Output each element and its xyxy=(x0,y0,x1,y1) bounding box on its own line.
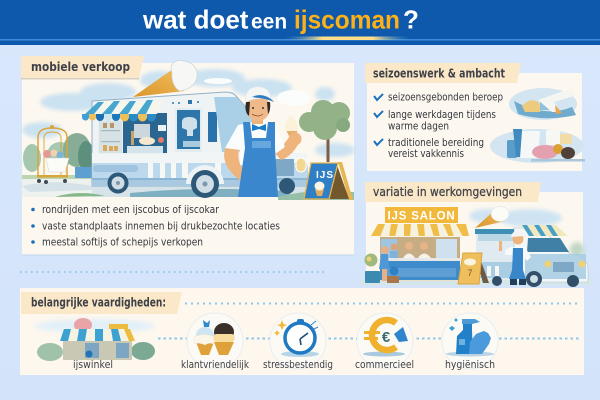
white clouds xyxy=(204,78,311,106)
dotted connectors xyxy=(185,302,581,304)
panel: variatie in werkomgevingen xyxy=(360,192,592,287)
icon: menu board: 7 xyxy=(467,268,473,278)
checklist: seizoensgebonden beroep xyxy=(388,92,503,104)
title: wat doet xyxy=(142,4,249,34)
icon: klantvriendelijk xyxy=(187,313,243,369)
label: hygiënisch: hygiënisch xyxy=(445,359,495,371)
left arm xyxy=(224,145,248,180)
awning xyxy=(85,101,163,114)
checklist: vereist vakkennis xyxy=(388,148,464,160)
awning scallops xyxy=(82,114,156,122)
icon: menu board xyxy=(458,253,489,284)
icon: stressbestendig xyxy=(270,313,326,369)
ice cream seller xyxy=(224,87,302,197)
icon: cone on small van roof xyxy=(475,206,509,228)
dotted divider xyxy=(20,271,326,273)
bushes xyxy=(23,133,94,172)
panel: belangrijke vaardigheden xyxy=(20,288,584,375)
icon: ice cream van xyxy=(82,92,307,198)
icon: ice cream shop xyxy=(35,318,155,361)
heading tab: mobiele verkoop xyxy=(21,56,144,80)
icon: IJS a-frame sign xyxy=(304,162,353,200)
checklist: warme dagen xyxy=(388,120,449,132)
apron xyxy=(238,122,278,197)
heading tab: belangrijke vaardigheden xyxy=(21,292,182,314)
van lower skirt xyxy=(92,153,307,164)
title: ijscoman xyxy=(294,4,400,34)
heading tab: belangrijke vaardigheden: belangrijke vaardigheden: xyxy=(31,296,166,310)
bullet list xyxy=(31,204,280,248)
tall blue window xyxy=(175,108,202,152)
serving window xyxy=(98,118,167,154)
bullet list: rondrijden met een ijscobus of ijscokar xyxy=(42,204,220,216)
head xyxy=(252,115,263,124)
shirt xyxy=(225,120,285,165)
people in salon xyxy=(390,242,431,259)
right arm xyxy=(272,136,299,160)
bullet list: vaste standplaats innemen bij drukbezochte locaties xyxy=(42,220,280,232)
cap xyxy=(246,87,274,102)
sky clouds xyxy=(22,69,355,157)
decor dots on van xyxy=(172,100,199,104)
icon: commercieel: € xyxy=(382,329,391,346)
bow tie xyxy=(252,124,266,131)
title: een xyxy=(251,10,287,34)
icon: ice cream salon: IJS SALON xyxy=(388,210,455,222)
title: ? xyxy=(403,4,419,34)
girl and plants xyxy=(364,246,399,283)
icon: hygiënisch xyxy=(442,313,498,369)
checklist xyxy=(374,92,503,160)
checklist: lange werkdagen tijdens xyxy=(388,109,496,121)
ground xyxy=(22,176,92,197)
bullet list: meestal softijs of schepijs verkopen xyxy=(42,236,203,248)
heading tab: variatie in werkomgevingen xyxy=(365,182,541,202)
label: ijswinkel: ijswinkel xyxy=(73,359,113,371)
background clouds xyxy=(469,209,584,258)
windscreen xyxy=(214,97,282,152)
icon: giant ice cream cone on the van roof xyxy=(133,60,197,97)
heading tab: mobiele verkoop: mobiele verkoop xyxy=(31,60,130,74)
heading tab: seizoenswerk en ambacht: seizoenswerk & ambacht xyxy=(373,66,505,80)
icon: ice cream salon xyxy=(364,207,469,283)
label: klantvriendelijk: klantvriendelijk xyxy=(181,359,250,371)
icon: ice cream tray xyxy=(509,88,577,120)
icon: IJS a-frame sign: IJS xyxy=(316,170,334,181)
icon: gold luggage cart with ice cream xyxy=(37,125,69,184)
illustration: street scene with ice cream van xyxy=(22,60,355,200)
header band xyxy=(0,0,600,45)
awning xyxy=(371,224,469,236)
label: commercieel: commercieel xyxy=(355,359,414,371)
heading tab: variatie in werkomgevingen: variatie in werkomgevingen xyxy=(373,185,522,199)
icon: small ice cream van xyxy=(475,225,588,287)
wheels xyxy=(108,165,295,198)
icon: ingredients and supplies xyxy=(490,129,585,163)
heading tab: seizoenswerk en ambacht xyxy=(365,63,521,83)
van body xyxy=(92,92,307,186)
icon: tree xyxy=(299,100,350,162)
small ice cream seller xyxy=(499,231,531,285)
hand-held ice cream xyxy=(286,130,298,142)
label: stressbestendig: stressbestendig xyxy=(263,359,333,371)
grille and headlamp xyxy=(275,159,294,176)
panel: mobiele verkoop xyxy=(22,60,355,256)
icon: commercieel xyxy=(357,313,413,369)
salon sign xyxy=(385,207,458,223)
checklist: traditionele bereiding xyxy=(388,137,484,149)
panel: seizoenswerk en ambacht xyxy=(367,73,585,171)
